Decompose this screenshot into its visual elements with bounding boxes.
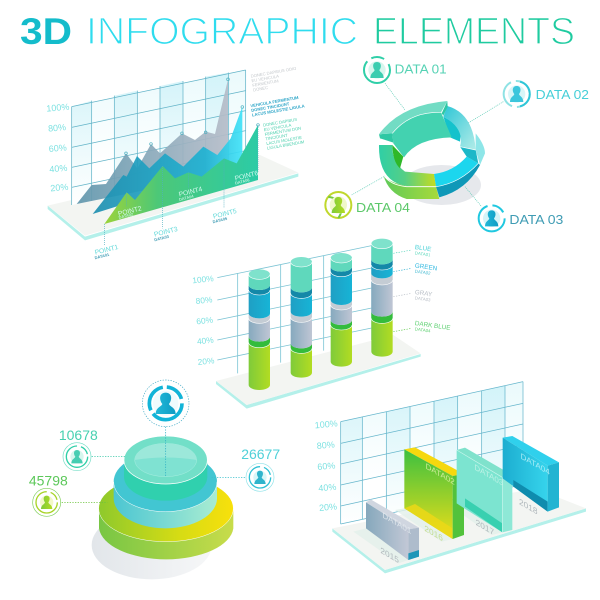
icon: 45798 [33, 488, 61, 516]
dotted leader lines [352, 83, 503, 207]
bar: 2016 [404, 447, 464, 539]
series legend notes: VEHICULA FERMENTUM [250, 95, 299, 108]
legend labels: DARK BLUE [414, 320, 451, 332]
panel: cylinder chart [192, 239, 451, 409]
label: DATA 04: DATA 04 [356, 200, 410, 215]
point labels: POINT5 [212, 208, 238, 221]
series legend notes: LACUS MOLESTIE LIGULA [252, 103, 305, 118]
year labels [380, 497, 538, 565]
data markers and dotted drops [104, 78, 259, 245]
grid [217, 246, 372, 373]
icon: DATA 04 [325, 192, 351, 218]
series legend notes: DONEC [253, 85, 268, 92]
panel: layered pyramid [29, 380, 280, 579]
axis labels: 60% [196, 315, 214, 326]
legend labels: GREEN [414, 262, 438, 273]
cylinder 3 [331, 253, 352, 367]
axis labels: 20% [50, 182, 69, 193]
axis labels: 80% [48, 122, 66, 134]
point labels: DATA06 [234, 177, 251, 186]
axis labels: 80% [195, 294, 213, 306]
point labels: DATA04 [178, 193, 195, 202]
panel: 3D bar chart [314, 382, 586, 573]
green area series [104, 125, 258, 224]
icon: DATA 01 [364, 57, 390, 83]
axis labels: 100% [314, 418, 338, 430]
bar: 2015 [366, 499, 419, 560]
middle tier [114, 452, 217, 528]
top tier [124, 436, 207, 501]
point labels: DATA02 [118, 211, 134, 220]
title: INFOGRAPHIC [86, 11, 358, 53]
year labels: 2017 [476, 517, 494, 537]
legend labels: BLUE [414, 244, 432, 253]
legend labels: DATA01 [415, 250, 431, 258]
axis labels: 20% [319, 501, 337, 513]
ring segment 03 [434, 157, 480, 197]
blue area series [93, 107, 242, 214]
axis labels: 40% [318, 482, 337, 493]
axis labels: 60% [317, 460, 336, 472]
chart floor [216, 335, 421, 409]
bar: 2016: DATA02 [426, 461, 455, 487]
axis labels: 40% [196, 335, 215, 346]
pyramid shadow [92, 511, 212, 579]
year labels: 2015 [380, 545, 399, 565]
axis labels: 60% [48, 142, 67, 154]
ring segment 01 [379, 101, 452, 157]
ring shadow [402, 165, 481, 205]
ring segment 02 [443, 106, 485, 165]
axis labels: 80% [316, 439, 335, 451]
icon: 10678 [63, 443, 91, 471]
axis labels: 40% [49, 163, 68, 174]
chart floor [332, 488, 586, 573]
cylinder 4 [371, 239, 393, 357]
legend labels: DATA03 [415, 295, 431, 303]
series legend notes [250, 66, 305, 151]
value: 26677: 26677 [241, 446, 280, 462]
bar: 2017 [457, 448, 512, 532]
cylinder 2 [291, 257, 312, 378]
point labels [94, 170, 259, 260]
legend leaders [393, 250, 412, 332]
icon: DATA 03 [479, 205, 505, 231]
grid [72, 70, 246, 205]
panel: area chart [46, 66, 305, 260]
axis labels [46, 102, 70, 193]
point labels: POINT1 [94, 244, 119, 257]
point labels: POINT2 [117, 205, 143, 218]
title: ELEMENTS [373, 11, 575, 53]
value: 45798: 45798 [29, 473, 68, 489]
point labels: POINT6 [234, 170, 259, 183]
series legend notes: FERMENTUM [252, 78, 279, 88]
bottom tier [99, 475, 233, 559]
icon: DATA 02 [504, 81, 530, 107]
title: 3D [20, 11, 72, 52]
label: DATA 03: DATA 03 [509, 212, 563, 227]
label: DATA 01: DATA 01 [395, 61, 447, 76]
year labels: 2018 [519, 497, 538, 517]
axis labels [314, 418, 338, 513]
title [20, 11, 575, 53]
big user icon [142, 380, 189, 427]
series legend notes: DONEC DAPIBUS ODIO [250, 66, 297, 79]
point labels: DATA03 [154, 234, 170, 242]
series legend notes: EU VEHICULA [251, 73, 280, 83]
point labels: POINT3 [153, 226, 179, 239]
point labels: DATA01 [94, 252, 110, 260]
chart floor [48, 155, 298, 240]
legend labels: DATA04 [415, 326, 431, 334]
legend labels [414, 244, 451, 334]
series legend notes: TINCIDUNT [265, 133, 288, 141]
bar: 2018: DATA04 [521, 451, 550, 477]
gray area series [77, 79, 228, 204]
pyramid leaders and dots [62, 427, 245, 502]
series legend notes: LIGULA BIBENDUM [267, 139, 305, 151]
icon: 26677 [246, 463, 274, 491]
panel: ring chart [325, 57, 589, 231]
label: DATA 02: DATA 02 [536, 87, 589, 102]
point labels: DATA05 [212, 216, 228, 224]
bar: 2017: DATA03 [474, 462, 503, 488]
series legend notes: DONEC TINCIDUNT [251, 101, 290, 113]
value: 10678: 10678 [59, 427, 98, 443]
series legend notes: EU VEHICULA [263, 122, 292, 132]
axis labels [192, 273, 215, 367]
axis labels: 100% [46, 102, 70, 114]
grid [341, 382, 523, 524]
bar: 2018 [503, 436, 559, 512]
floor shadows [353, 507, 502, 563]
series legend notes: FERMENTUM DON [264, 126, 302, 137]
bar: 2015: DATA01 [382, 510, 411, 536]
axis labels: 20% [197, 355, 215, 367]
legend labels: DATA02 [415, 269, 431, 276]
ring segment 04 [379, 145, 439, 199]
series legend notes: LACUS MOLESTIE [266, 135, 302, 146]
cylinder 1 [249, 269, 270, 390]
point labels: POINT4 [178, 186, 203, 199]
axis labels: 100% [192, 273, 215, 285]
series legend notes: DONEC DAPIBUS [263, 117, 298, 128]
legend labels: GRAY [414, 289, 433, 299]
year labels: 2016 [424, 523, 443, 543]
